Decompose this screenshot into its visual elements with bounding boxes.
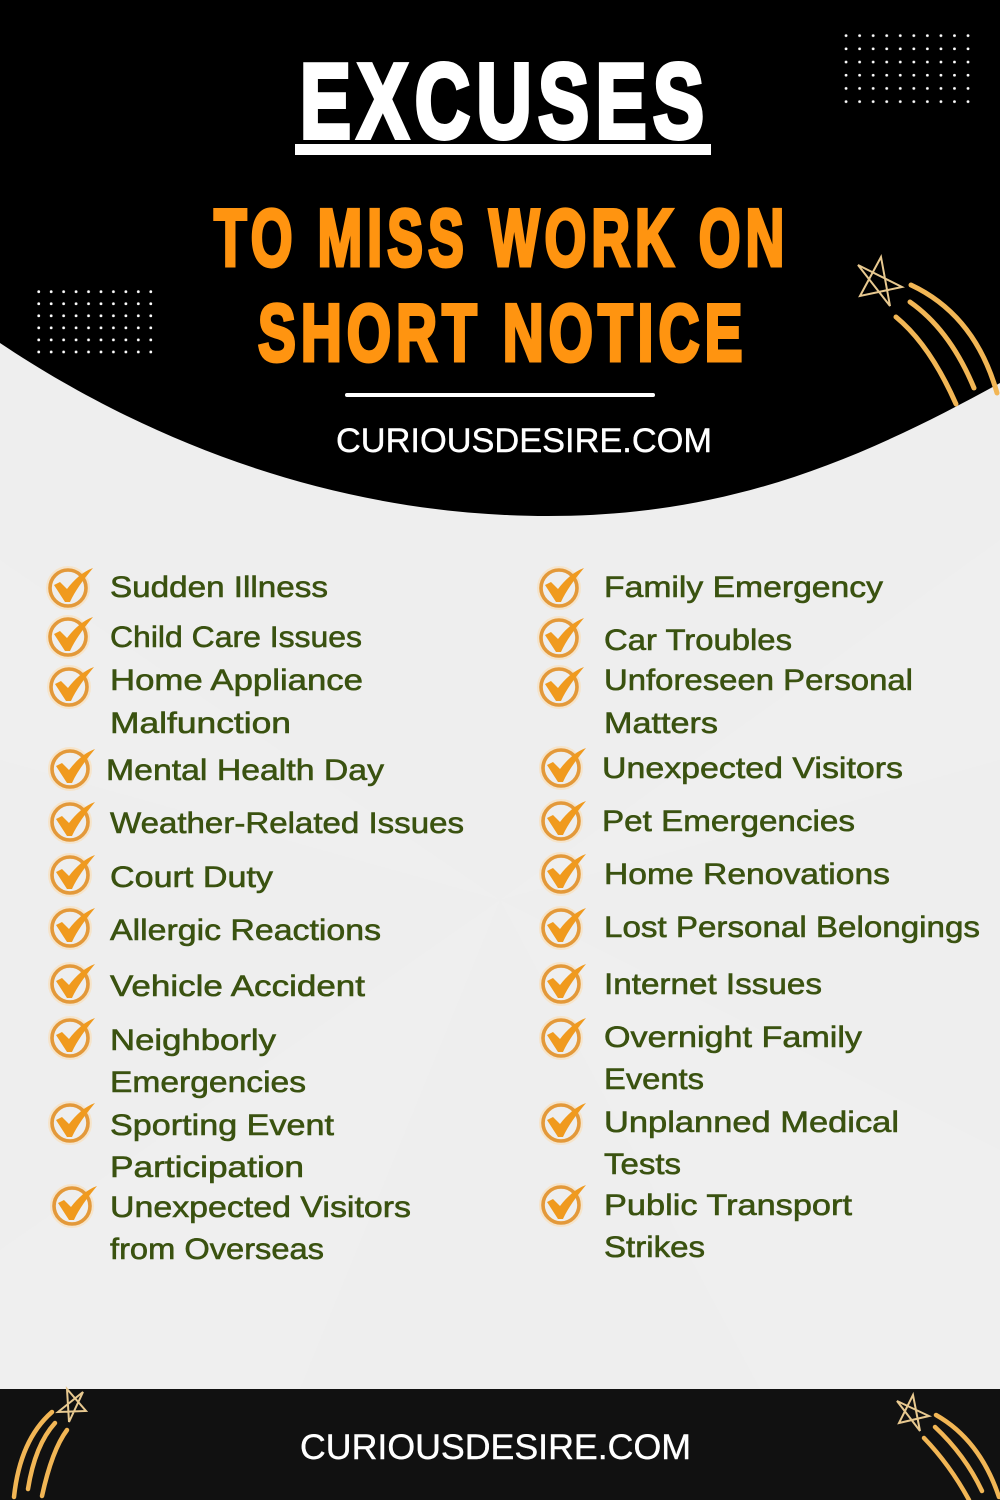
right checklist: [540, 568, 980, 1264]
subtitle: SHORT NOTICE: [258, 288, 742, 378]
item: Pet Emergencies: [542, 801, 855, 840]
title: Excuses: EXCUSES: [300, 41, 704, 160]
item: Internet Issues: Internet Issues: [604, 968, 822, 1001]
item: Car Troubles: Car Troubles: [604, 624, 792, 657]
item: Unexpected Visitors: [542, 748, 903, 787]
item: Mental Health Day: Mental Health Day: [106, 754, 384, 787]
item: Neighborly Emergencies: Emergencies: [110, 1066, 306, 1099]
website text footer: CURIOUSDESIRE.COM: [300, 1428, 691, 1467]
title underline: [295, 144, 711, 155]
item: Public Transport Strikes: Strikes: [604, 1231, 705, 1264]
item: Unexpected Visitors from Overseas: Unexpected Visitors: [110, 1191, 411, 1224]
item: Sporting Event Participation: Participation: [110, 1151, 304, 1184]
item: Public Transport Strikes: Public Transport: [604, 1189, 853, 1222]
item: Family Emergency: Family Emergency: [604, 571, 883, 604]
subtitle: [214, 192, 784, 378]
item: Unforeseen Personal Matters: Matters: [604, 707, 718, 740]
item: Unexpected Visitors: Unexpected Visitors: [602, 752, 903, 785]
header black curved panel: [0, 0, 1000, 516]
item: Unexpected Visitors from Overseas: from Overseas: [110, 1233, 324, 1266]
item: Lost Personal Belongings: [542, 908, 980, 947]
item: Child Care Issues: Child Care Issues: [110, 621, 362, 654]
left checklist: [49, 568, 464, 1266]
item: Sporting Event Participation: [51, 1103, 335, 1184]
dot grid left: [32, 286, 157, 358]
dot grid top right: [839, 29, 975, 108]
item: Unforeseen Personal Matters: Unforeseen Personal: [604, 664, 913, 697]
header divider line: [345, 393, 655, 397]
item: Car Troubles: [540, 618, 792, 657]
item: Neighborly Emergencies: [51, 1018, 306, 1099]
item: Family Emergency: [540, 568, 883, 607]
item: Unplanned Medical Tests: [542, 1103, 899, 1181]
item: Allergic Reactions: Allergic Reactions: [110, 914, 381, 947]
item: Internet Issues: [542, 964, 822, 1003]
footer band: [0, 1389, 1000, 1500]
item: Sudden Illness: Sudden Illness: [110, 571, 328, 604]
item: Weather-Related Issues: [51, 802, 464, 841]
item: Vehicle Accident: Vehicle Accident: [110, 970, 366, 1003]
item: Public Transport Strikes: [542, 1185, 853, 1264]
item: Pet Emergencies: Pet Emergencies: [602, 805, 855, 838]
item: Child Care Issues: [49, 617, 362, 656]
item: Unplanned Medical Tests: Tests: [604, 1148, 681, 1181]
item: Vehicle Accident: [51, 964, 366, 1003]
item: Home Renovations: Home Renovations: [604, 858, 890, 891]
website text header: CURIOUSDESIRE.COM: [336, 422, 712, 460]
item: Mental Health Day: [51, 749, 384, 788]
item: Unforeseen Personal Matters: [540, 664, 913, 740]
icon: shooting star top right: [858, 257, 997, 404]
item: Home Appliance Malfunction: [50, 664, 363, 740]
item: Lost Personal Belongings: Lost Personal Belongings: [604, 911, 980, 944]
item: Home Renovations: [542, 854, 890, 893]
icon: shooting star bottom right: [897, 1395, 999, 1500]
item: Home Appliance Malfunction: Home Appliance: [110, 664, 363, 697]
item: Court Duty: Court Duty: [110, 861, 273, 894]
item: Overnight Family Events: Overnight Family: [604, 1021, 862, 1054]
item: Court Duty: [51, 855, 273, 894]
icon: shooting star bottom left: [14, 1389, 86, 1497]
item: Home Appliance Malfunction: Malfunction: [110, 707, 291, 740]
item: Unexpected Visitors from Overseas: [53, 1186, 411, 1266]
subtitle: TO MISS WORK ON: [214, 192, 784, 283]
item: Unplanned Medical Tests: Unplanned Medical: [604, 1106, 899, 1139]
item: Sudden Illness: [49, 568, 328, 607]
item: Neighborly Emergencies: Neighborly: [110, 1024, 276, 1057]
item: Allergic Reactions: [51, 908, 381, 947]
item: Overnight Family Events: [542, 1018, 862, 1096]
item: Weather-Related Issues: Weather-Related Issues: [110, 807, 464, 840]
item: Overnight Family Events: Events: [604, 1063, 704, 1096]
item: Sporting Event Participation: Sporting Event: [110, 1109, 335, 1142]
